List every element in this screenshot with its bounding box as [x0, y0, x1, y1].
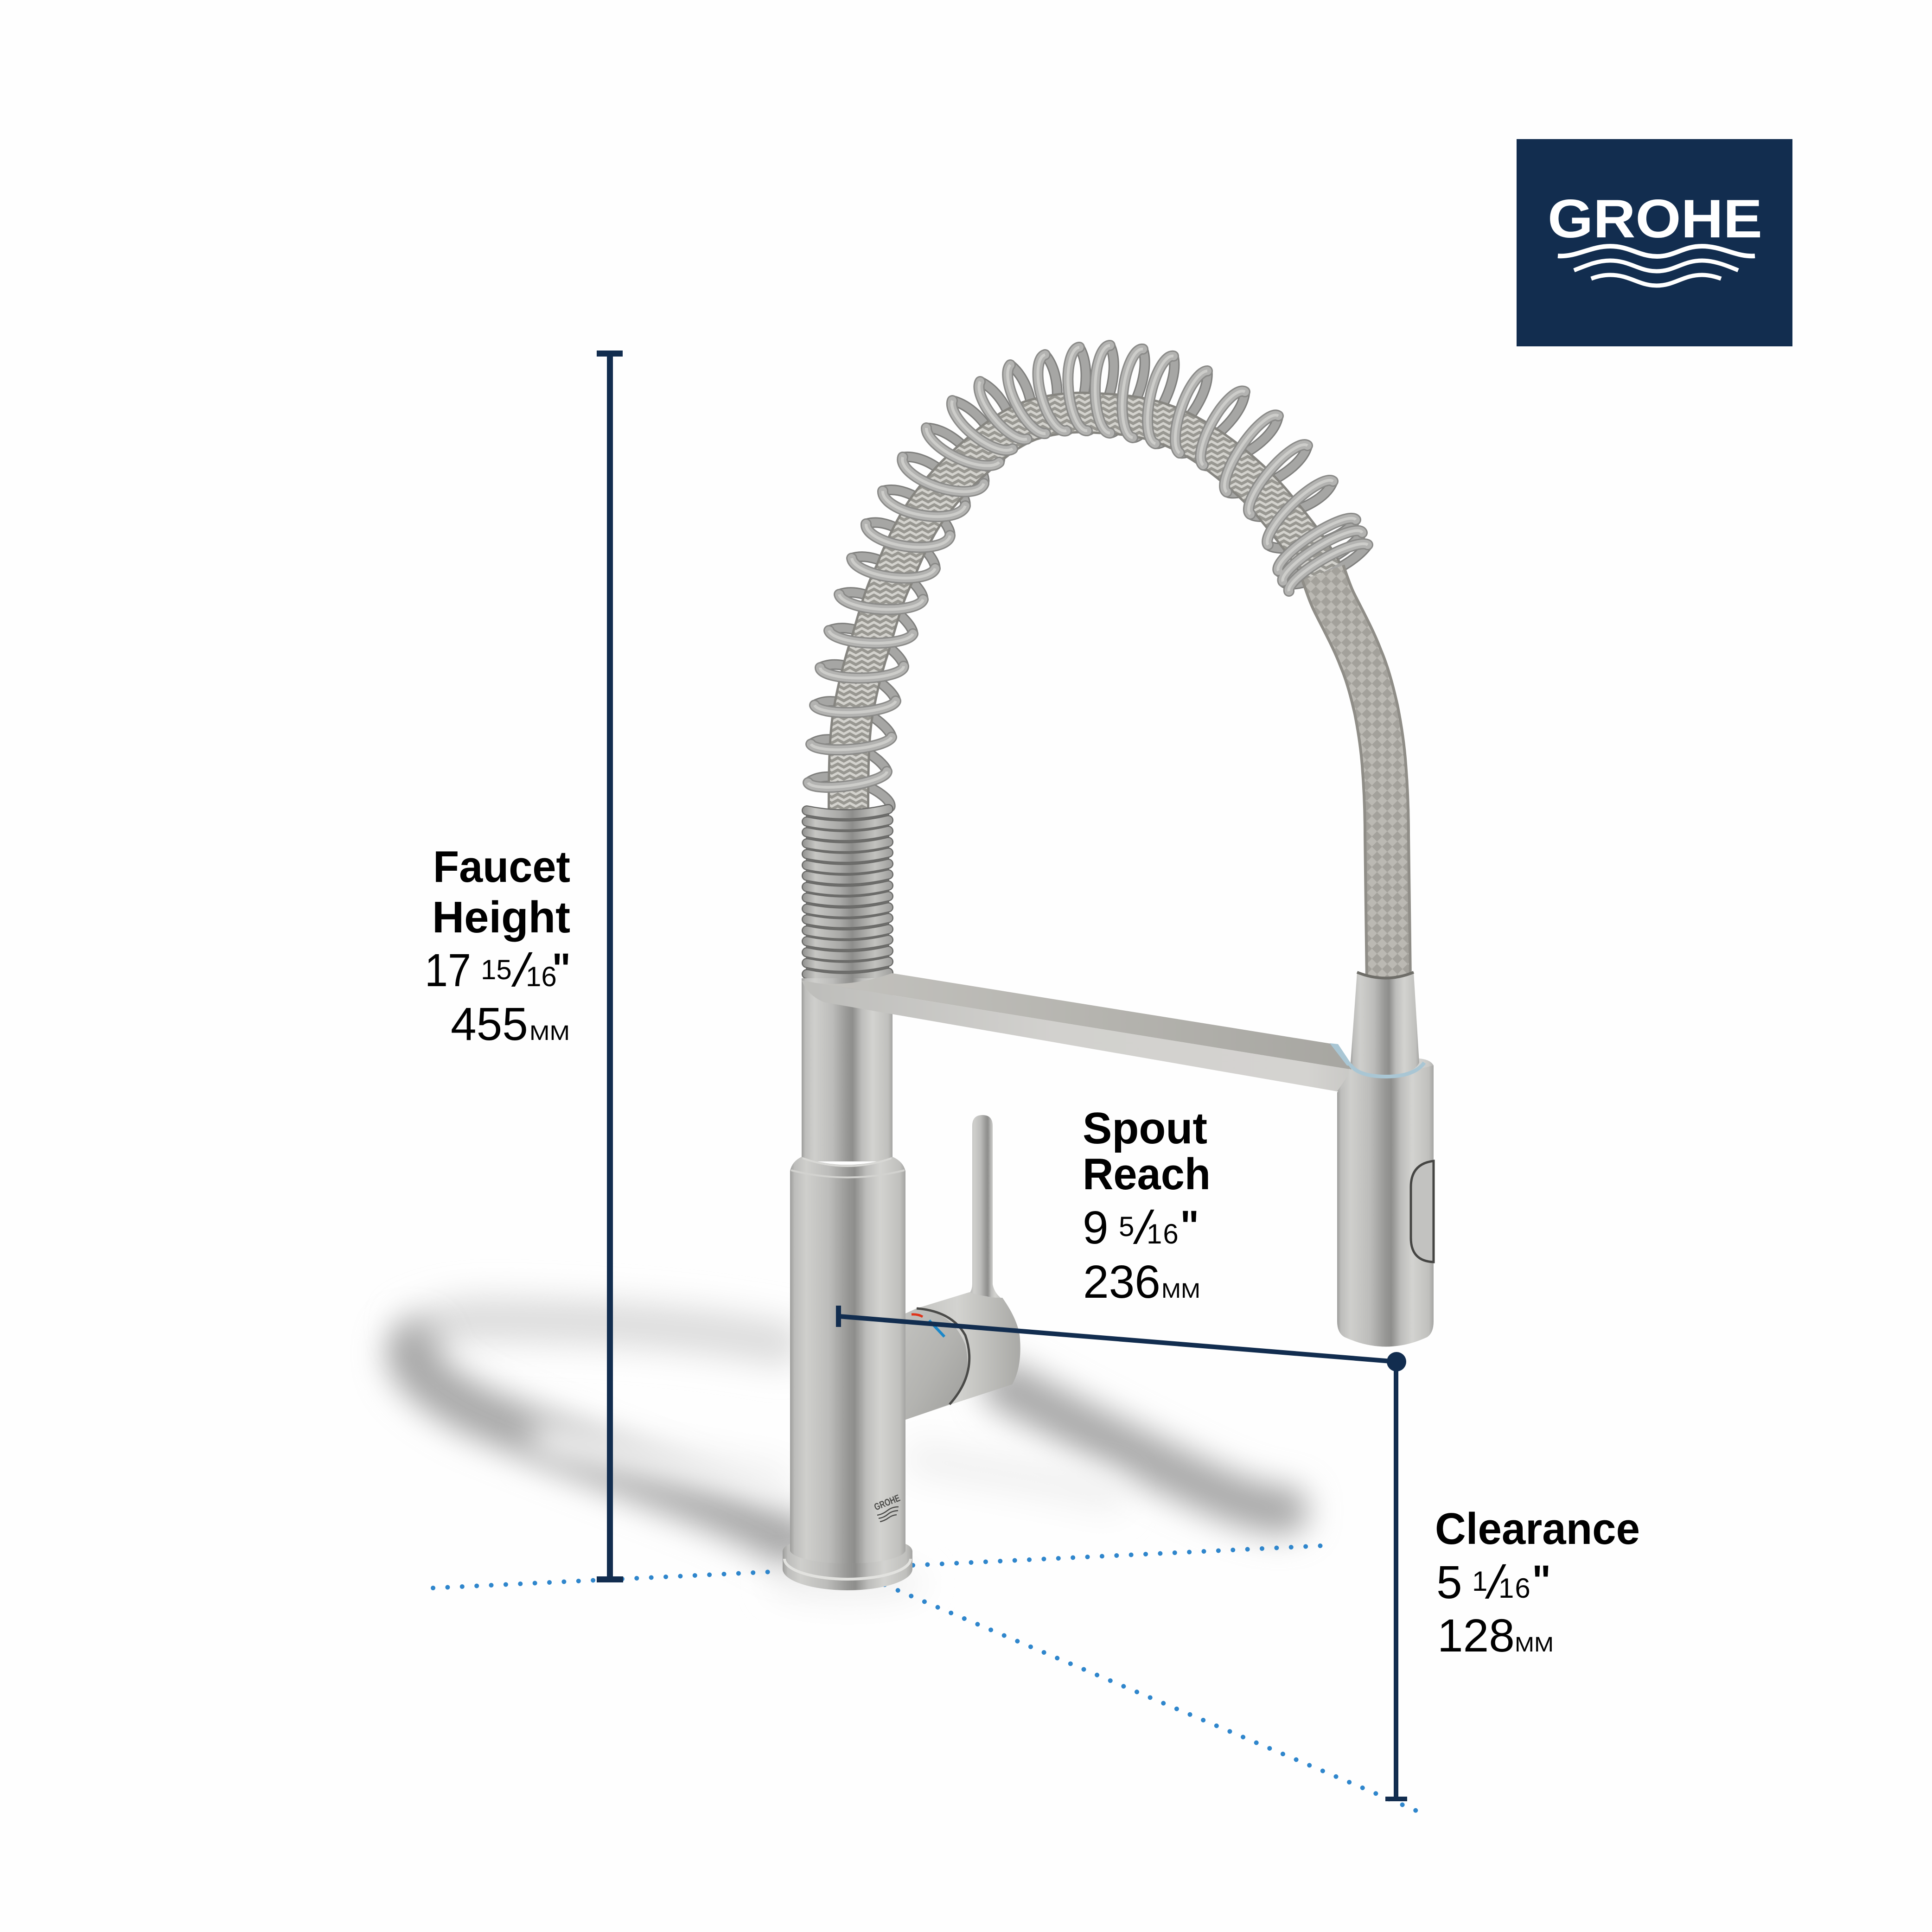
lever handle stem	[969, 1115, 1002, 1299]
braided hose, free section	[1323, 573, 1389, 981]
label: clearance: "	[1533, 1556, 1549, 1608]
label: spout reach: 5	[1119, 1211, 1134, 1242]
lever hub	[905, 1292, 1020, 1420]
cold mark	[929, 1320, 944, 1337]
label: faucet height: 17	[425, 944, 471, 996]
label: clearance: 16	[1498, 1573, 1531, 1604]
label: faucet height	[425, 842, 570, 1050]
dotted floor lines	[433, 1546, 1422, 1813]
coil spring: back strands	[808, 345, 1368, 807]
label: clearance: 5	[1436, 1556, 1462, 1608]
label: spout reach: 9	[1083, 1202, 1109, 1254]
label: spout reach: /	[1131, 1201, 1157, 1254]
small GROHE mark on body	[873, 1493, 902, 1522]
coil spring: front strands	[808, 345, 1368, 787]
spout arm	[802, 973, 1434, 1097]
label: faucet height: Faucet	[433, 842, 570, 892]
spray button	[1411, 1161, 1434, 1262]
label: clearance: MM	[1515, 1632, 1554, 1656]
faucet	[783, 345, 1434, 1590]
dimension line: spout reach	[836, 1306, 1396, 1362]
logo waves	[1558, 246, 1755, 286]
label: faucet height: Height	[432, 893, 570, 942]
label: faucet height: 455	[451, 998, 528, 1050]
label: clearance: 1	[1472, 1566, 1487, 1597]
GROHE logo	[1517, 139, 1792, 346]
dimension line: clearance	[1385, 1352, 1407, 1801]
braided hose inside coil	[848, 413, 1323, 814]
label: spout reach: 236	[1083, 1256, 1160, 1308]
label: faucet height: MM	[529, 1021, 570, 1045]
label: faucet height: 15	[481, 954, 512, 985]
faucet body	[790, 1157, 905, 1563]
label: faucet height: /	[509, 944, 535, 996]
label: clearance	[1435, 1504, 1640, 1662]
label: spout reach	[1083, 1103, 1211, 1308]
small GROHE mark on body: GROHE	[873, 1493, 902, 1513]
upper tube	[802, 978, 893, 1161]
label: spout reach: Reach	[1083, 1149, 1211, 1199]
label: clearance: /	[1483, 1556, 1509, 1608]
label: spout reach: "	[1181, 1202, 1198, 1254]
tight coil section	[806, 809, 889, 983]
base flange	[783, 1544, 912, 1590]
pull-down spray head	[1337, 972, 1434, 1346]
label: spout reach: 16	[1147, 1218, 1180, 1250]
faucet cast shadow	[408, 1319, 1284, 1600]
label: clearance: Clearance	[1435, 1504, 1640, 1554]
GROHE logo: GROHE	[1548, 188, 1762, 249]
label: faucet height: "	[553, 944, 569, 996]
label: clearance: 128	[1437, 1610, 1515, 1662]
label: spout reach: Spout	[1083, 1103, 1207, 1153]
dimension line: faucet height	[597, 351, 623, 1582]
label: spout reach: MM	[1161, 1279, 1200, 1302]
label: faucet height: 16	[526, 961, 557, 992]
hot mark	[912, 1314, 923, 1317]
